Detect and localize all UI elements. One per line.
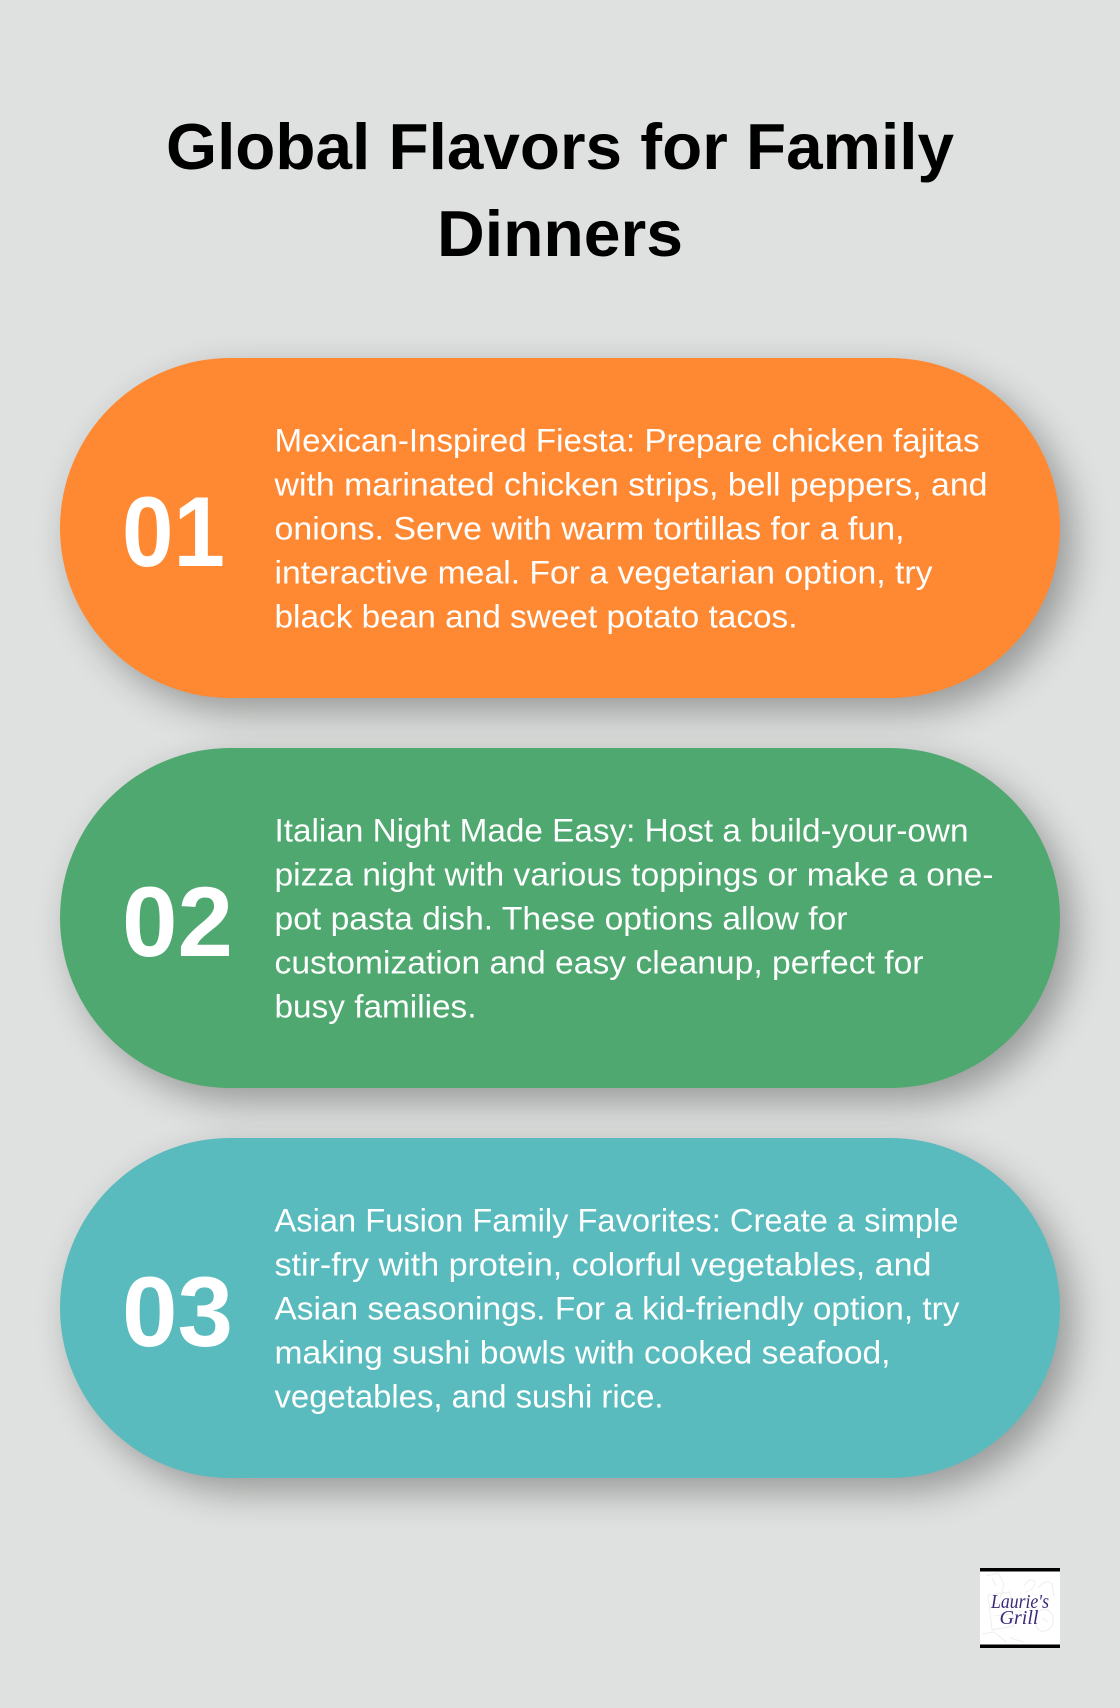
text: Italian Night Made Easy description: Italian Night Made Easy: Host a build-your-own: [274, 812, 968, 848]
text: Asian Fusion Family Favorites description: making sushi bowls with cooked seafood,: [274, 1334, 890, 1370]
text: Mexican-Inspired Fiesta description: interactive meal. For a vegetarian option, try: [274, 554, 932, 590]
text: Asian Fusion Family Favorites description: Asian seasonings. For a kid-friendly option, try: [274, 1290, 960, 1326]
title: [166, 110, 954, 270]
text: Asian Fusion Family Favorites description: stir-fry with protein, colorful vegetables, and: [274, 1246, 932, 1282]
text: Asian Fusion Family Favorites description: Asian Fusion Family Favorites: Create a simple: [274, 1202, 958, 1238]
text: Mexican-Inspired Fiesta description: Mexican-Inspired Fiesta: Prepare chicken fajitas: [274, 422, 979, 458]
text: Mexican-Inspired Fiesta description: [273, 422, 988, 634]
title: Global Flavors for Family: [166, 110, 954, 183]
text: Italian Night Made Easy description: pizza night with various toppings or make a one-: [274, 856, 994, 892]
panel: step 01 Mexican-Inspired Fiesta: [60, 358, 1060, 698]
text: Italian Night Made Easy description: pot pasta dish. These options allow for: [274, 900, 848, 936]
text: Mexican-Inspired Fiesta description: with marinated chicken strips, bell peppers, and: [273, 466, 988, 502]
number 01: 01: [122, 476, 225, 587]
text: Italian Night Made Easy description: busy families.: [274, 988, 476, 1024]
logo: Laurie's Grill: Grill: [1000, 1607, 1039, 1629]
text: Asian Fusion Family Favorites description: vegetables, and sushi rice.: [274, 1378, 664, 1414]
number 02: 02: [122, 866, 233, 977]
text: Mexican-Inspired Fiesta description: onions. Serve with warm tortillas for a fun,: [274, 510, 904, 546]
text: Italian Night Made Easy description: [274, 812, 994, 1024]
title: Dinners: [437, 197, 683, 270]
text: Mexican-Inspired Fiesta description: black bean and sweet potato tacos.: [274, 598, 798, 634]
text: Italian Night Made Easy description: customization and easy cleanup, perfect for: [274, 944, 924, 980]
panel: step 03 Asian Fusion Family Favorites: [60, 1138, 1060, 1478]
panel: step 02 Italian Night Made Easy: [60, 748, 1060, 1088]
logo: Laurie's Grill: [980, 1568, 1060, 1648]
text: Asian Fusion Family Favorites description: [274, 1202, 960, 1414]
logo: Laurie's Grill: Laurie's: [990, 1591, 1049, 1613]
number 03: 03: [122, 1256, 233, 1367]
